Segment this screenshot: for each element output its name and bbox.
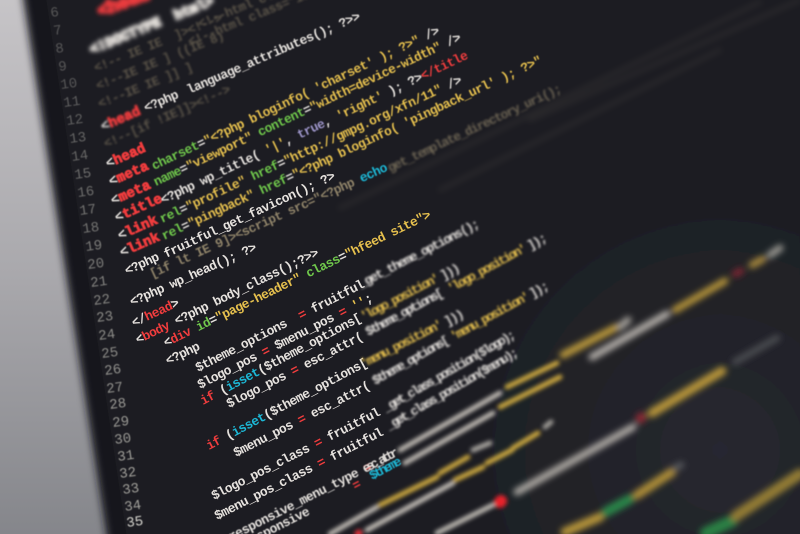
top dim conditional rows: <!--IE IE ] ((IE 8) [94, 29, 226, 94]
code: php variables slightly out of focus: 'menu_position' [448, 289, 532, 345]
code: php variables in focus: $theme_options = fruitful [193, 277, 367, 376]
code: meta and link rows: rel="profile" href="http://gmpg.org/xfn/11" /> [157, 73, 465, 227]
code: php variables in focus: $logo_pos_class = fruitful [209, 405, 383, 504]
line numbers: 28 [108, 396, 127, 414]
line numbers: 19 [84, 238, 103, 256]
line numbers [49, 5, 144, 532]
line numbers: 33 [121, 481, 140, 499]
code: favicon row [122, 169, 338, 279]
code: favicon row: fruitful_get_favicon(); ?> [161, 169, 338, 262]
line numbers: 25 [100, 345, 119, 363]
line numbers: 10 [59, 76, 78, 94]
code: wp_head row: <?php wp_head(); ?> [128, 240, 259, 310]
code: php variables in focus: if (isset($theme_options[ [198, 311, 364, 409]
line numbers: 7 [52, 23, 63, 40]
line numbers: 27 [105, 380, 124, 398]
code: php variables slightly out of focus: _get_theme_options(); [355, 217, 482, 292]
code: head tag: <head [99, 104, 143, 136]
code: php variables slightly out of focus: _get_class_position($menu); [383, 345, 521, 434]
line numbers: 9 [57, 59, 68, 76]
code: php variables slightly out of focus: ])) [442, 307, 467, 330]
line numbers: 30 [113, 431, 132, 449]
code: php variables in focus [193, 277, 386, 524]
code: php variables slightly out of focus: 'menu_position' [358, 317, 445, 372]
line numbers: 12 [65, 112, 84, 130]
code: responsive rows: = [350, 477, 364, 494]
code: meta and link rows: <link [118, 230, 162, 262]
faint top right rows [340, 0, 800, 208]
code: php variables slightly out of focus: ]); [527, 279, 551, 302]
code: php variables in focus: $menu_pos_class = fruitful [212, 425, 386, 524]
code: meta and link rows: <link [116, 213, 160, 245]
code: meta and link rows: <meta [107, 159, 152, 191]
line numbers: 8 [54, 41, 65, 58]
mid blurred code rows [330, 363, 560, 534]
code: meta and link rows [104, 23, 544, 262]
code: php variables in focus: $logo_pos = $menu_pos = ''; [195, 291, 375, 393]
code: favicon row: <?php [122, 249, 162, 279]
code: php variables slightly out of focus: 'logo_position' [445, 241, 529, 297]
line numbers: 34 [123, 498, 142, 516]
code: responsive rows [226, 445, 405, 534]
code: conditional script row: [if lt IE 9]><script src="<?php echo [147, 160, 390, 282]
code: php variables slightly out of focus: 'logo_position' [358, 271, 442, 325]
line numbers: 21 [89, 274, 108, 292]
line numbers: 13 [68, 130, 87, 148]
line numbers: 15 [73, 166, 92, 184]
code: responsive rows: esc_attr [360, 445, 400, 477]
code: php variables in focus: $logo_pos = esc_attr( [224, 330, 366, 412]
line numbers: 35 [125, 514, 144, 532]
code: meta and link rows: rel="pingback" href="<?php bloginfo( 'pingback_url' ); ?>" [159, 54, 544, 244]
code: template uri row, fading out: get_template_directory_uri(); [385, 82, 564, 176]
line numbers: 22 [92, 292, 111, 310]
line numbers: 17 [78, 202, 97, 220]
code: head close and body: <body <?php body_class();?>> [133, 245, 322, 348]
top dim conditional rows: <!--IE IE ]] ] [96, 60, 195, 112]
line numbers: 20 [86, 256, 105, 274]
code: php variables slightly out of focus: $theme_options[ [370, 333, 452, 388]
line numbers: 11 [62, 94, 81, 112]
code: meta and link rows: <head [104, 141, 148, 173]
code: head close and body: <?php [163, 339, 203, 369]
line numbers: 24 [97, 327, 116, 345]
code: language attributes [142, 9, 363, 116]
top blurred head rows: <!DOCTYPE [88, 12, 172, 59]
line numbers: 16 [76, 184, 95, 202]
code: php variables slightly out of focus: $theme_options[ [363, 286, 446, 340]
code: php variables in focus: if (isset($theme_options[ [204, 356, 370, 454]
code: language attributes: <?php [142, 87, 181, 116]
top blurred head rows [88, 0, 217, 59]
far blurred code rows [517, 248, 800, 533]
code: responsive rows: $theme [367, 454, 405, 484]
code: php variables slightly out of focus [355, 217, 551, 434]
line numbers: 6 [49, 5, 60, 22]
top dim conditional rows: <!--[if !IE]]><!--> [102, 82, 233, 152]
code: php variables slightly out of focus: ])) [438, 261, 463, 284]
top dim conditional rows [92, 0, 348, 152]
code: meta and link rows: <title [113, 191, 165, 227]
line numbers: 32 [118, 465, 137, 483]
code: meta and link rows: <?php wp_title( '|', true, 'right' ); ?></title [158, 48, 471, 208]
code: php variables in focus: $menu_pos = esc_attr( [231, 379, 373, 461]
line numbers: 31 [116, 448, 135, 466]
code: php variables slightly out of focus: ]); [525, 231, 549, 254]
line numbers: 14 [70, 148, 89, 166]
code: language attributes: language_attributes(); ?>> [185, 9, 363, 98]
code: head close and body: </head> [129, 295, 182, 331]
code: meta and link rows: name="viewport" content="width=device-width" /> [151, 30, 464, 190]
line numbers: 26 [103, 362, 122, 380]
line numbers: 29 [111, 414, 130, 432]
code: meta and link rows: <meta [109, 178, 154, 210]
top dim conditional rows: <!-- IE IE ]><!--> [92, 10, 225, 76]
code: head close and body: <div id="page-header" class="hfeed site"> [161, 207, 434, 351]
line numbers: 18 [81, 220, 100, 238]
code: meta and link rows: charset="<?php bloginfo( 'charset' ); ?>" /> [149, 23, 442, 174]
code: php variables slightly out of focus: _get_class_position($logo); [380, 328, 518, 416]
line numbers: 23 [95, 309, 114, 327]
